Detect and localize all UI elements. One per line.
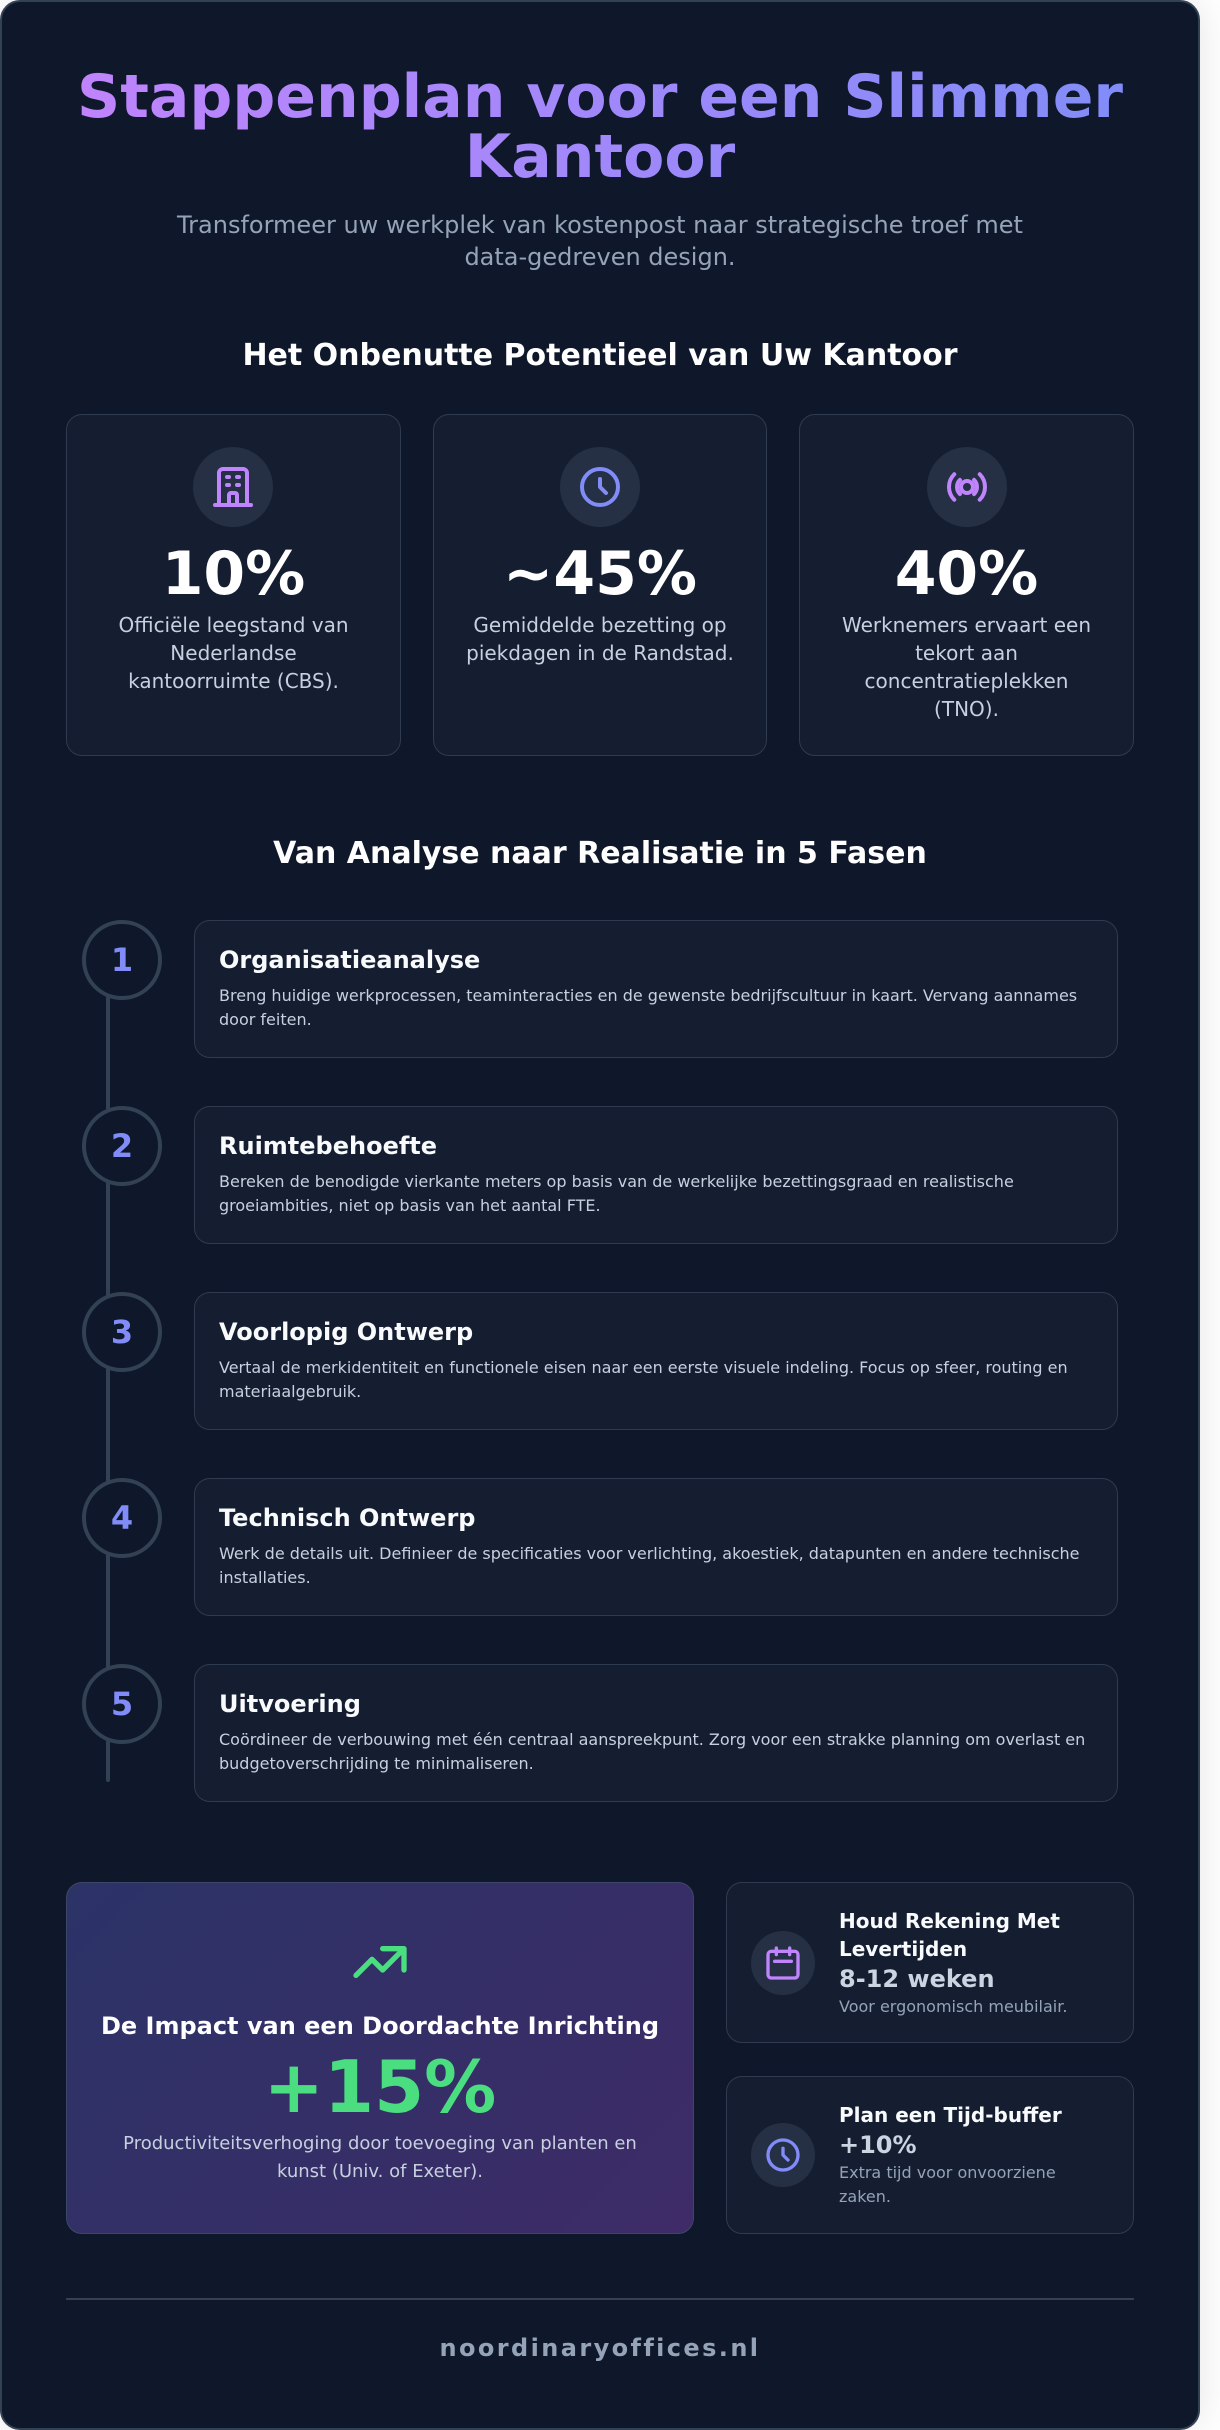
tip text bbox=[839, 2103, 1062, 2206]
tip text: Voor ergonomisch meubilair. bbox=[839, 1997, 1067, 2016]
stat: 10%: 10% bbox=[162, 539, 305, 609]
step number 4: 4 bbox=[111, 1499, 133, 1537]
icon: clock bbox=[560, 447, 640, 527]
tip text: +10% bbox=[839, 2131, 917, 2159]
step number 3 bbox=[82, 1292, 162, 1372]
step title: Organisatieanalyse bbox=[219, 946, 480, 974]
panel: step 4 bbox=[194, 1478, 1118, 1616]
panel: step 2 bbox=[194, 1106, 1118, 1244]
icon: signal bbox=[927, 447, 1007, 527]
panel: step 3 bbox=[194, 1292, 1118, 1430]
footer text: noordinaryoffices.nl bbox=[440, 2334, 760, 2362]
step description: Vertaal de merkidentiteit en functionele eisen naar een eerste visuele indeling. Focus op sfeer, routing en materiaalgebruik. bbox=[219, 1358, 1068, 1401]
icon: clock bbox=[751, 2123, 815, 2187]
panel: stat vacancy bbox=[66, 414, 401, 756]
icon: trending up bbox=[353, 1946, 407, 1978]
title: Stappenplan voor een Slimmer Kantoor bbox=[77, 62, 1123, 192]
stat description: Gemiddelde bezetting op piekdagen in de Randstad. bbox=[466, 613, 734, 665]
tip text: 8-12 weken bbox=[839, 1965, 995, 1993]
step title: Technisch Ontwerp bbox=[219, 1504, 475, 1532]
panel: step 1 bbox=[194, 920, 1118, 1058]
step number 2 bbox=[82, 1106, 162, 1186]
stat: 40%: 40% bbox=[895, 539, 1038, 609]
footer divider bbox=[66, 2298, 1134, 2300]
step description: Breng huidige werkprocessen, teaminteracties en de gewenste bedrijfscultuur in kaart. Vervang aannames door feiten. bbox=[219, 986, 1077, 1029]
heading: phases: Van Analyse naar Realisatie in 5 Fasen bbox=[273, 836, 927, 871]
step description: Bereken de benodigde vierkante meters op basis van de werkelijke bezettingsgraad en realistische groeiambities, niet op basis van het aantal FTE. bbox=[219, 1172, 1014, 1215]
step number 1: 1 bbox=[111, 941, 133, 979]
timeline line bbox=[106, 960, 110, 1782]
stat description: Officiële leegstand van Nederlandse kantoorruimte (CBS). bbox=[118, 613, 349, 693]
step number 5 bbox=[82, 1664, 162, 1744]
step number 5: 5 bbox=[111, 1685, 133, 1723]
stat: ~45%: ~45% bbox=[503, 539, 697, 609]
tip text bbox=[839, 1909, 1067, 2016]
panel: step 5 bbox=[194, 1664, 1118, 1802]
step number 3: 3 bbox=[111, 1313, 133, 1351]
step title: Voorlopig Ontwerp bbox=[219, 1318, 473, 1346]
step title: Ruimtebehoefte bbox=[219, 1132, 437, 1160]
impact heading: De Impact van een Doordachte Inrichting bbox=[101, 2012, 659, 2040]
subtitle: Transformeer uw werkplek van kostenpost naar strategische troef met bbox=[177, 211, 1023, 239]
step number 2: 2 bbox=[111, 1127, 133, 1165]
panel: lead times bbox=[726, 1882, 1134, 2043]
heading: potential: Het Onbenutte Potentieel van Uw Kantoor bbox=[242, 338, 958, 373]
subtitle: data-gedreven design. bbox=[464, 243, 736, 271]
subtitle bbox=[176, 211, 1023, 271]
step number 1 bbox=[82, 920, 162, 1000]
tip text: Houd Rekening Met Levertijden bbox=[839, 1909, 1060, 1961]
impact number: +15% bbox=[264, 2045, 496, 2129]
icon: building bbox=[193, 447, 273, 527]
step title: Uitvoering bbox=[219, 1690, 361, 1718]
step description: Coördineer de verbouwing met één centraal aanspreekpunt. Zorg voor een strakke planning om overlast en budgetoverschrijding te minimaliseren. bbox=[219, 1730, 1085, 1773]
step number 4 bbox=[82, 1478, 162, 1558]
step description: Werk de details uit. Definieer de specificaties voor verlichting, akoestiek, datapunten en andere technische installaties. bbox=[219, 1544, 1080, 1587]
tip text: Plan een Tijd-buffer bbox=[839, 2103, 1062, 2127]
impact description: Productiviteitsverhoging door toevoeging van planten en kunst (Univ. of Exeter). bbox=[123, 2133, 637, 2182]
tip text: Extra tijd voor onvoorziene zaken. bbox=[839, 2163, 1056, 2206]
panel: time buffer bbox=[726, 2076, 1134, 2234]
panel: stat concentration bbox=[799, 414, 1134, 756]
icon: calendar bbox=[751, 1931, 815, 1995]
panel: stat occupancy bbox=[433, 414, 767, 756]
panel: impact bbox=[66, 1882, 694, 2234]
stat description: Werknemers ervaart een tekort aan concentratieplekken (TNO). bbox=[842, 613, 1091, 721]
